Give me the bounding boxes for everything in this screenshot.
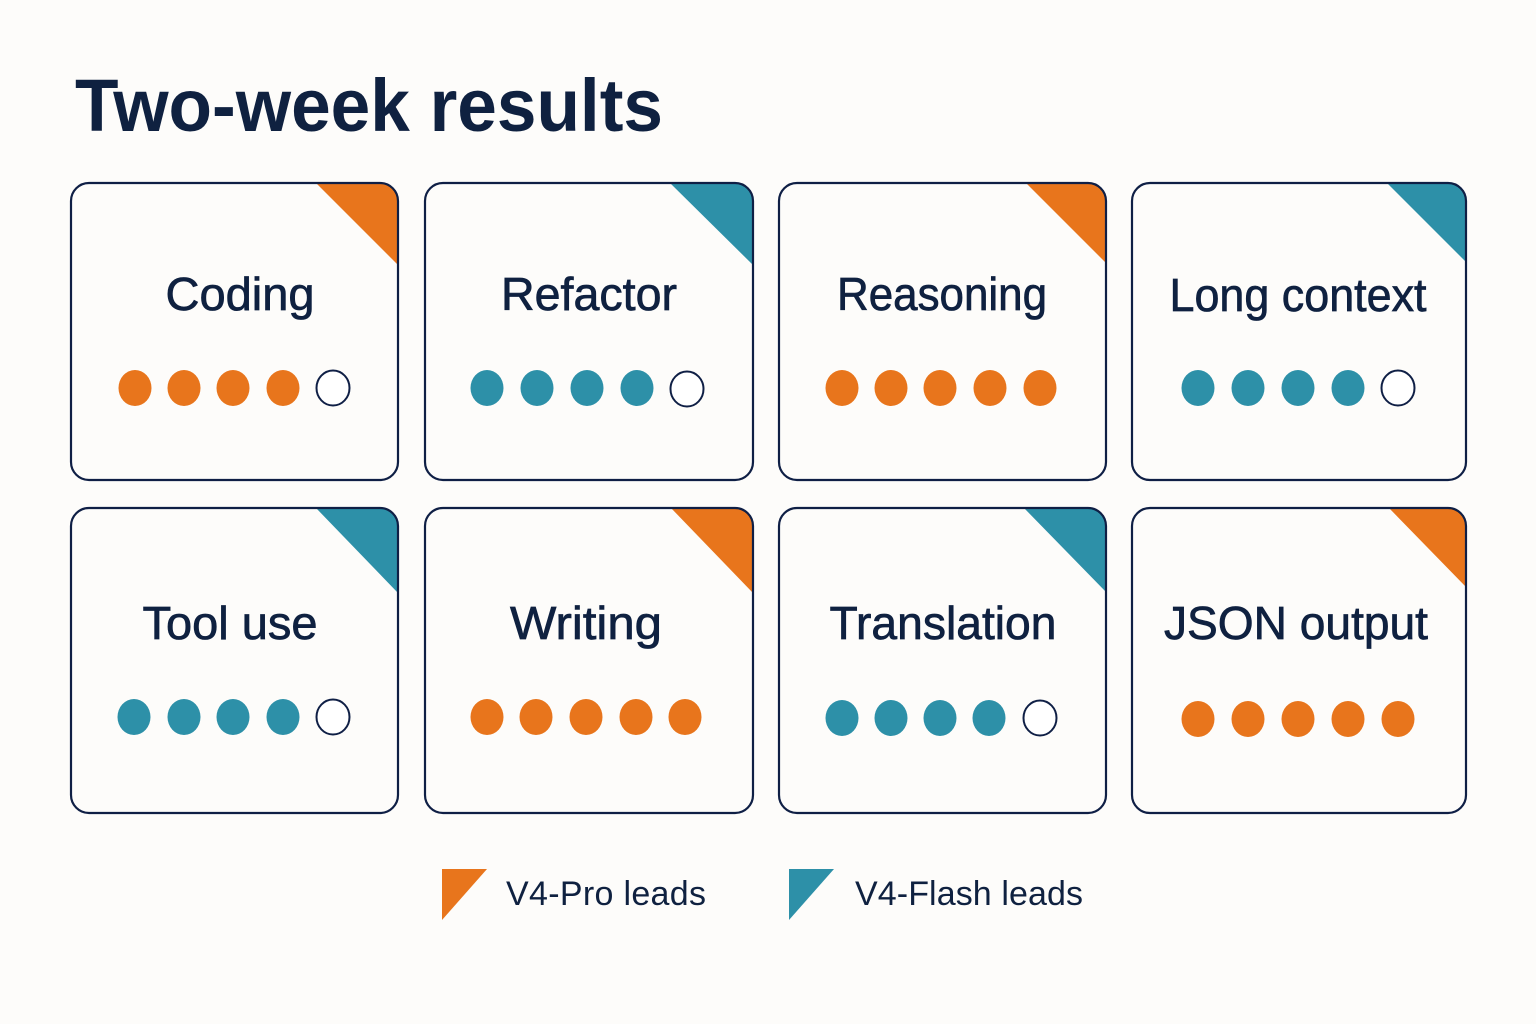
score dots [470,370,704,406]
legend item: V4-Flash leads [789,869,1083,920]
panel: Refactor [425,183,753,480]
title: Two-week results [75,64,663,147]
label: Translation [830,597,1056,649]
score dots [118,699,350,735]
corner: V4-Flash [1387,183,1466,262]
corner: V4-Flash [1024,508,1106,592]
score dots [826,370,1056,406]
legend [442,869,1083,920]
corner: V4-Pro [671,508,753,593]
label: Reasoning [837,268,1047,320]
label: Coding [166,268,314,320]
legend item: V4-Flash leads: V4-Flash leads [855,875,1083,913]
panel: Translation [779,508,1106,813]
score dots [118,370,350,406]
panel: Tool use [71,508,398,813]
panel: JSON output [1132,508,1466,813]
label: Tool use [142,597,318,649]
score dots [470,699,702,735]
label: Refactor [501,268,677,320]
label: Writing [510,597,662,649]
corner: V4-Pro [1389,508,1466,587]
corner: V4-Flash [670,183,753,265]
corner: V4-Pro [1026,183,1106,263]
corner: V4-Flash [316,508,398,593]
label: Long context [1170,269,1427,321]
score dots [826,700,1056,736]
legend item: V4-Pro leads [442,869,706,920]
corner: V4-Pro [316,183,398,265]
panel: Writing [425,508,753,813]
legend item: V4-Pro leads: V4-Pro leads [506,875,706,913]
panel: Long context [1132,183,1466,480]
score dots [1182,370,1414,406]
label: JSON output [1164,597,1428,649]
panel: Reasoning [779,183,1106,480]
score dots [1182,701,1414,737]
panel: Coding [71,183,398,480]
